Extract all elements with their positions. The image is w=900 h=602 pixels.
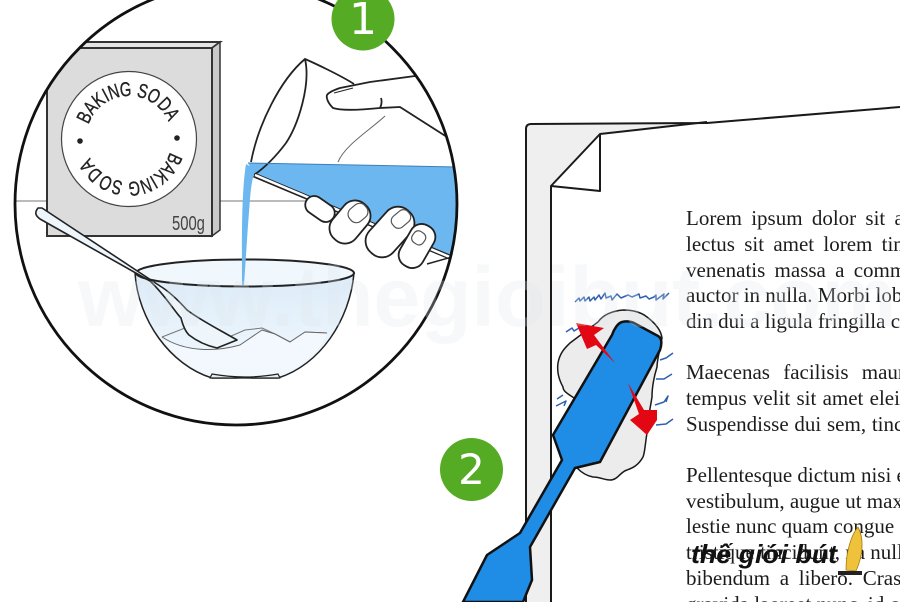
baking soda box: S — [135, 79, 151, 103]
hand — [302, 76, 452, 272]
baking soda box: G — [119, 78, 132, 101]
baking soda box: I — [98, 84, 113, 106]
water in jug — [248, 163, 460, 262]
baking soda box: B — [72, 108, 97, 127]
baking soda box: D — [153, 93, 177, 116]
table line — [16, 200, 306, 202]
paper sheet — [527, 123, 700, 602]
document text — [686, 206, 900, 602]
baking soda box: B — [162, 150, 187, 168]
spoon — [36, 208, 237, 348]
panel: step 1 mixing illustration — [0, 0, 460, 425]
stain — [558, 310, 662, 480]
baking soda box: A — [74, 155, 99, 176]
baking soda box: A — [78, 96, 102, 119]
baking soda box: O — [95, 170, 116, 196]
mixing bowl — [135, 260, 354, 379]
brand logo — [691, 527, 862, 575]
baking soda box: G — [127, 177, 141, 200]
blue scraper — [463, 321, 661, 602]
baking soda box: N — [137, 173, 155, 198]
baking soda box: O — [143, 83, 165, 109]
baking soda box: 500g — [172, 212, 205, 235]
panel: step 2 paper with stain — [463, 107, 900, 602]
baking soda box: A — [160, 104, 185, 124]
jug — [248, 59, 458, 258]
baking soda box: D — [83, 163, 106, 187]
pour stream — [242, 164, 256, 285]
step 2 badge — [440, 438, 503, 501]
document text: bibendum a libero. Cras — [686, 566, 900, 590]
baking soda box: A — [157, 158, 181, 180]
brand logo: thế giới bút — [691, 539, 838, 569]
red arrows — [576, 323, 657, 435]
baking soda box — [47, 42, 220, 236]
baking soda box: N — [105, 79, 122, 104]
step 2 badge: 2 — [458, 445, 485, 494]
baking soda box: S — [109, 175, 124, 200]
baking soda box: I — [146, 171, 161, 193]
baking soda box: K — [150, 165, 172, 189]
document text: lestie nunc quam congue — [686, 514, 894, 538]
step 1 badge — [332, 0, 394, 50]
baking soda box: K — [87, 88, 109, 112]
ink scribbles — [556, 293, 673, 425]
circle outline — [15, 0, 457, 425]
watermark: www.thegioibut.com — [77, 250, 896, 344]
